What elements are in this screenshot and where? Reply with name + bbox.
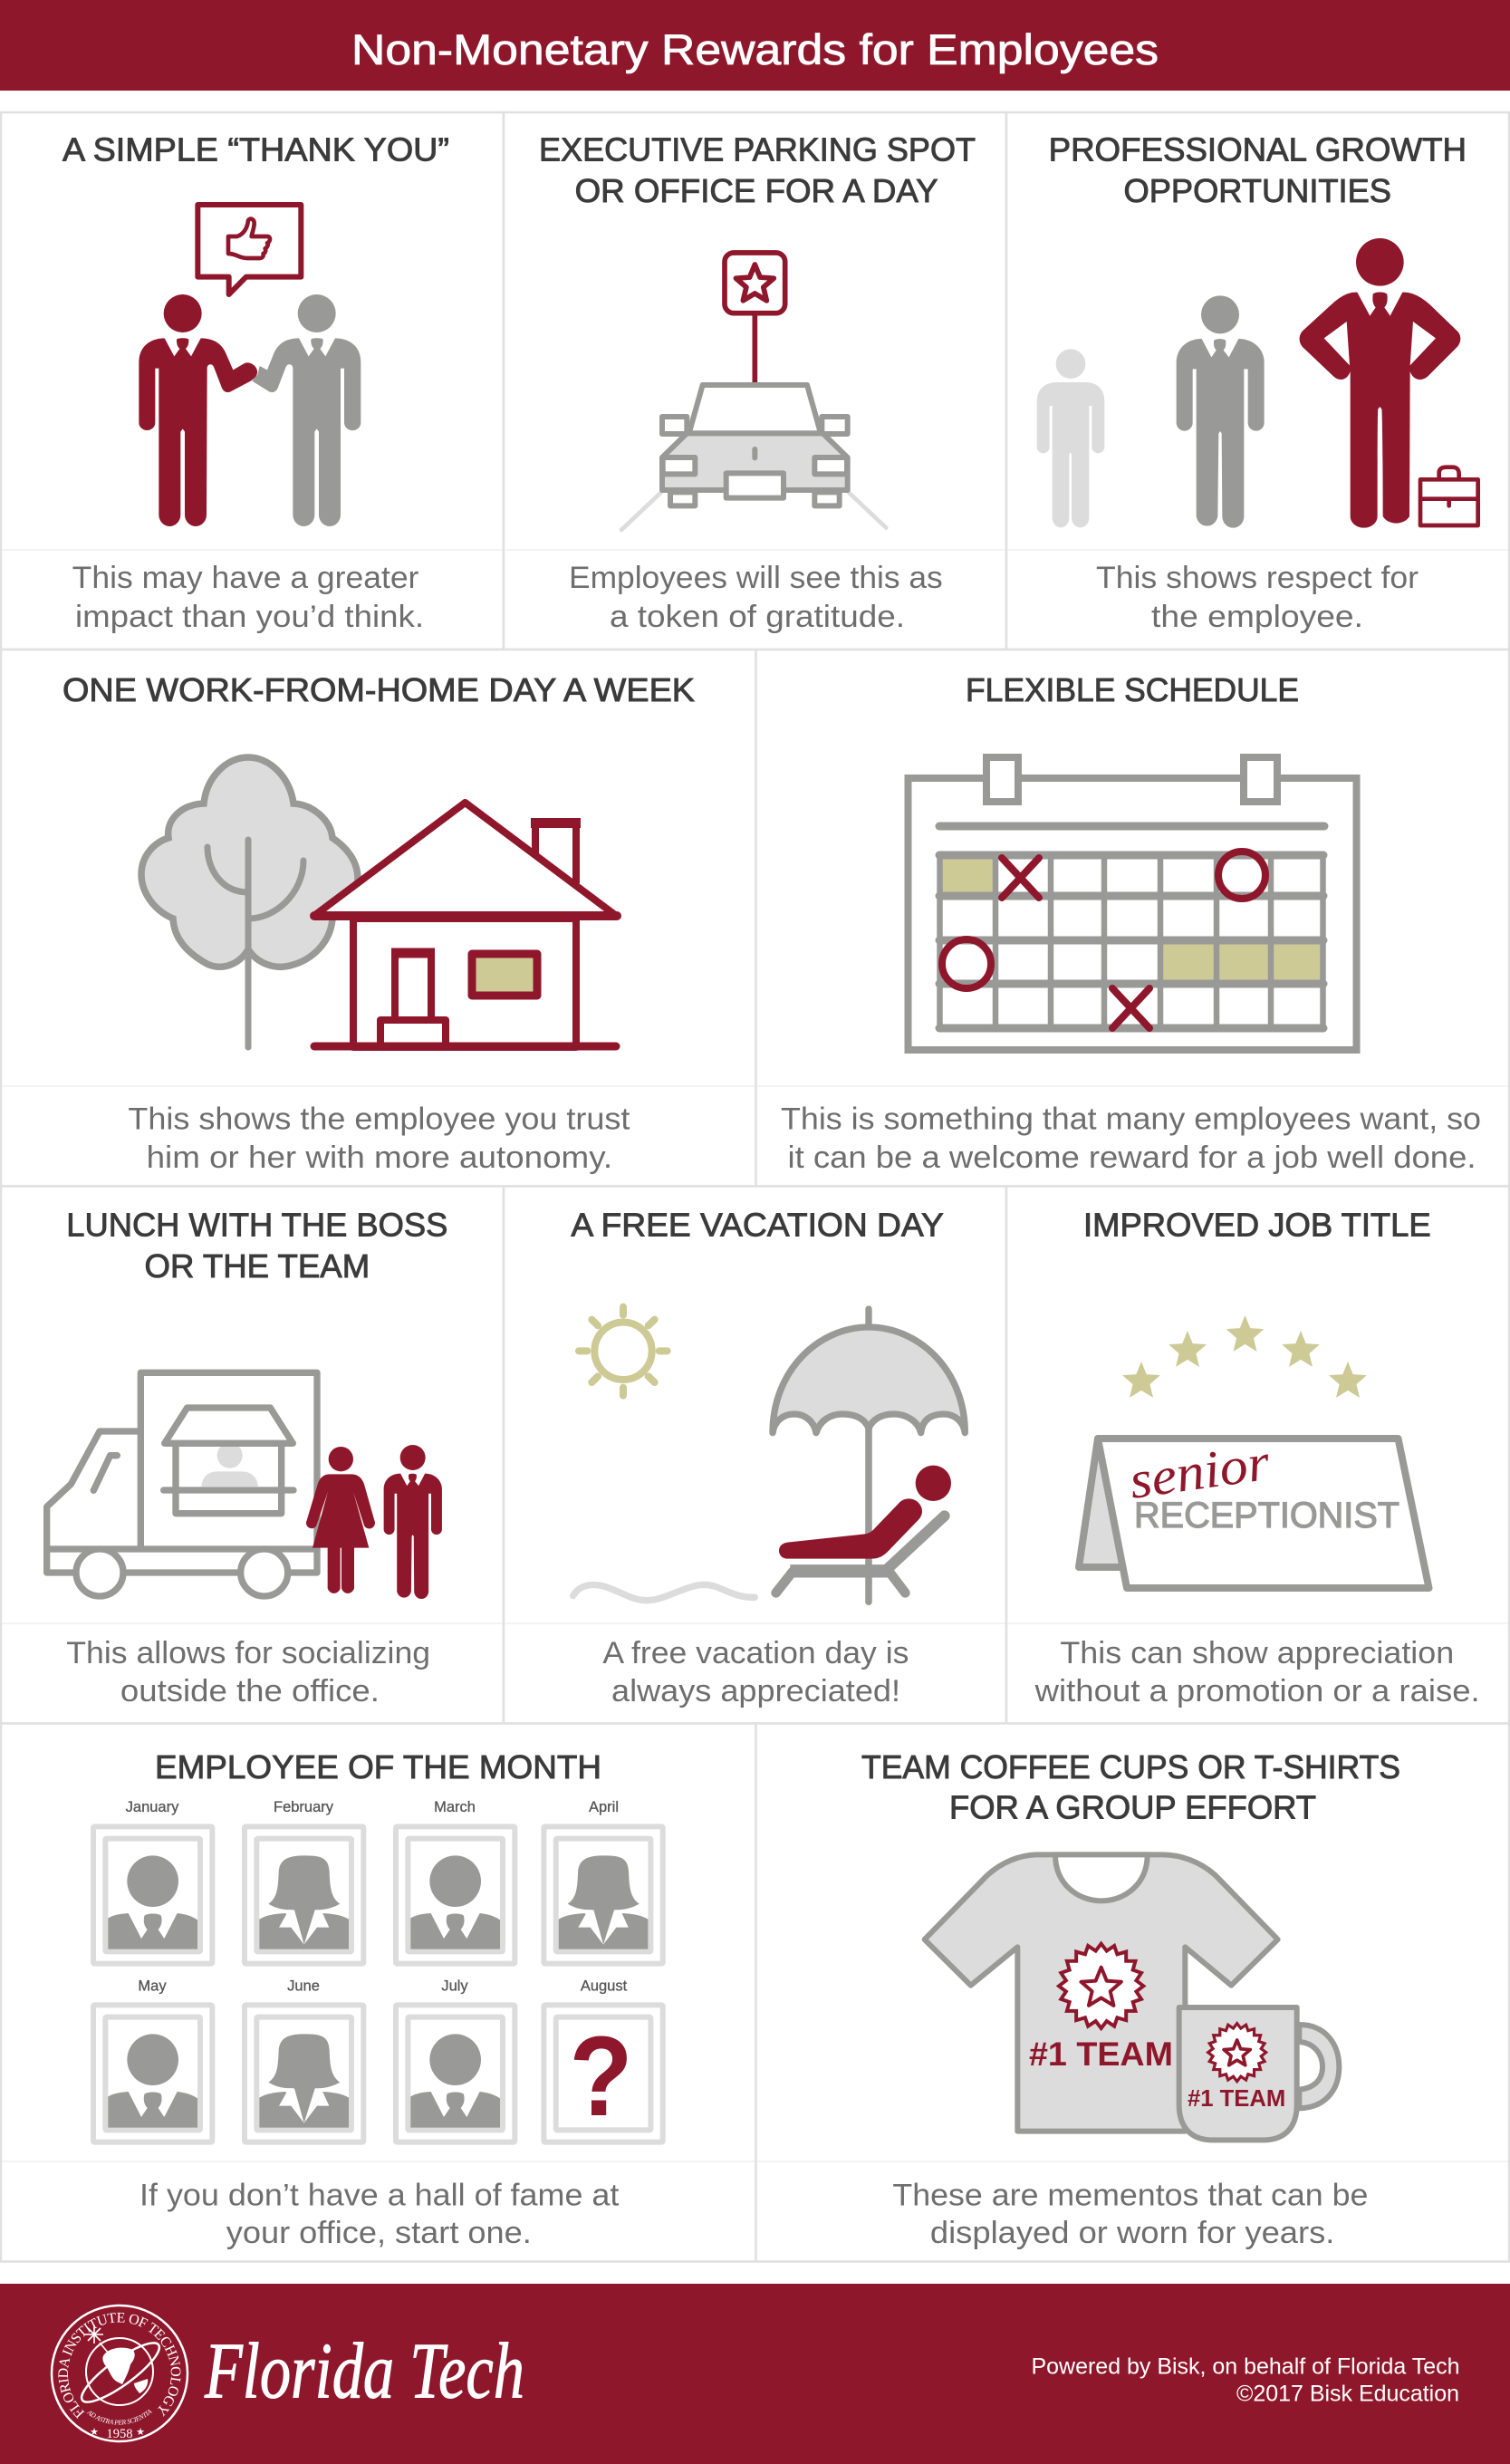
caption: executive parking: Employees will see this as <box>569 561 943 595</box>
month labels: February <box>274 1799 334 1815</box>
icon: car under a star parking sign <box>621 253 886 530</box>
caption: lunch with the boss <box>66 1636 430 1708</box>
caption: team coffee cups or t-shirts: These are mementos that can be <box>892 2178 1368 2212</box>
caption: improved job title: without a promotion or a raise. <box>1034 1674 1480 1708</box>
caption: professional growth: This shows respect for <box>1096 561 1419 595</box>
heading: employee of the month: EMPLOYEE OF THE MONTH <box>155 1748 601 1785</box>
heading: flexible schedule: FLEXIBLE SCHEDULE <box>966 671 1299 708</box>
heading: team coffee cups or t-shirts <box>861 1748 1400 1826</box>
title: Non-Monetary Rewards for Employees <box>351 25 1159 73</box>
panel: lunch with the boss <box>1 1187 504 1723</box>
month labels: January <box>126 1799 179 1815</box>
caption: employee of the month <box>139 2178 620 2250</box>
heading: free vacation day: A FREE VACATION DAY <box>571 1206 944 1243</box>
icon: t-shirt and mug with #1 team badge <box>925 1854 1339 2140</box>
month labels <box>126 1799 628 1995</box>
icon: question mark: ? <box>569 2014 632 2140</box>
heading: simple thank you: A SIMPLE “THANK YOU” <box>63 130 449 168</box>
icon: t-shirt and mug with #1 team badge: #1 TEAM <box>1188 2084 1285 2112</box>
month labels: May <box>138 1978 167 1995</box>
caption: employee of the month: If you don’t have a hall of fame at <box>139 2178 620 2212</box>
month labels: March <box>434 1799 476 1815</box>
caption: simple thank you: This may have a greater <box>72 561 418 595</box>
panel: team coffee cups or t-shirts <box>755 1723 1509 2261</box>
credits: Powered by Bisk, on behalf of Florida Tech <box>1031 2354 1460 2380</box>
month labels: April <box>589 1799 619 1815</box>
panel: executive parking <box>504 112 1006 650</box>
panel: professional growth <box>1006 112 1509 650</box>
panel: work from home <box>1 650 755 1187</box>
caption: team coffee cups or t-shirts: displayed or worn for years. <box>930 2216 1334 2250</box>
month labels: August <box>581 1978 628 1995</box>
heading: improved job title: IMPROVED JOB TITLE <box>1083 1206 1431 1243</box>
heading: professional growth <box>1049 130 1467 209</box>
logo: Florida Institute of Technology seal: FLORIDA INSTITUTE OF TECHNOLOGY <box>58 2312 181 2419</box>
job title: receptionist: RECEPTIONIST <box>1134 1496 1399 1535</box>
caption: free vacation day: always appreciated! <box>611 1674 900 1708</box>
panel: free vacation day <box>504 1187 1006 1723</box>
month labels: July <box>441 1978 468 1995</box>
heading: executive parking: EXECUTIVE PARKING SPOT <box>539 130 976 168</box>
credits: ©2017 Bisk Education <box>1236 2381 1459 2406</box>
caption: simple thank you <box>72 561 424 634</box>
caption: professional growth: the employee. <box>1151 600 1363 634</box>
heading: team coffee cups or t-shirts: TEAM COFFEE CUPS OR T-SHIRTS <box>861 1748 1400 1785</box>
panel: flexible schedule <box>755 650 1509 1187</box>
panel: simple thank you <box>1 112 504 650</box>
caption: work from home: This shows the employee you trust <box>128 1102 630 1136</box>
caption: simple thank you: impact than you’d think. <box>75 600 424 634</box>
caption: flexible schedule: This is something that many employees want, so <box>781 1102 1481 1136</box>
credits <box>1031 2354 1460 2406</box>
caption: flexible schedule <box>781 1102 1481 1175</box>
logo wordmark: Florida Tech: Florida Tech <box>204 2328 524 2415</box>
logo: Florida Institute of Technology seal: ★ <box>90 2426 99 2438</box>
panel: employee of the month <box>1 1723 755 2261</box>
script word: senior: senior <box>1126 1432 1274 1510</box>
icon: sun, umbrella and lounging person <box>573 1307 965 1602</box>
icon: food truck with two people <box>47 1372 442 1599</box>
caption: flexible schedule: it can be a welcome reward for a job well done. <box>788 1141 1476 1175</box>
caption: professional growth <box>1096 561 1419 634</box>
header banner <box>0 0 1510 91</box>
caption: executive parking <box>569 561 943 634</box>
icon: t-shirt and mug with #1 team badge: #1 TEAM <box>1029 2035 1173 2073</box>
caption: free vacation day <box>602 1636 909 1708</box>
heading: work from home: ONE WORK-FROM-HOME DAY A WEEK <box>63 671 695 708</box>
panel: improved job title <box>1006 1187 1509 1723</box>
heading: team coffee cups or t-shirts: FOR A GROUP EFFORT <box>949 1789 1316 1826</box>
caption: free vacation day: A free vacation day is <box>602 1636 909 1670</box>
caption: lunch with the boss: This allows for socializing <box>66 1636 430 1670</box>
logo: Florida Institute of Technology seal: 1958 <box>107 2427 132 2441</box>
icon: calendar with marks <box>908 757 1357 1050</box>
heading: executive parking: OR OFFICE FOR A DAY <box>575 172 938 209</box>
logo: Florida Institute of Technology seal: ★ <box>136 2426 145 2438</box>
icon: three men growing in size with briefcase <box>1037 238 1478 528</box>
caption: team coffee cups or t-shirts <box>892 2178 1368 2250</box>
heading: professional growth: PROFESSIONAL GROWTH <box>1049 130 1467 168</box>
heading: professional growth: OPPORTUNITIES <box>1123 172 1391 209</box>
heading: lunch with the boss: LUNCH WITH THE BOSS <box>66 1206 447 1243</box>
photo frames <box>93 1826 663 2142</box>
month labels: June <box>287 1978 320 1995</box>
heading: lunch with the boss <box>66 1206 447 1285</box>
caption: improved job title: This can show appreciation <box>1060 1636 1454 1670</box>
heading: executive parking <box>539 130 976 209</box>
caption: lunch with the boss: outside the office. <box>120 1674 380 1708</box>
caption: work from home <box>128 1102 630 1175</box>
caption: work from home: him or her with more autonomy. <box>147 1141 612 1175</box>
heading: lunch with the boss: OR THE TEAM <box>145 1247 370 1285</box>
caption: improved job title <box>1034 1636 1480 1708</box>
caption: employee of the month: your office, start one. <box>226 2216 532 2250</box>
caption: executive parking: a token of gratitude. <box>610 600 905 634</box>
icon: tree and house <box>141 757 617 1047</box>
logo: Florida Institute of Technology seal: AD ASTRA PER SCIENTIAM <box>87 2410 152 2424</box>
icon: stars and desk name plate <box>1079 1315 1429 1588</box>
icon: two men shaking hands with thumbs-up speech bubble <box>139 205 361 526</box>
